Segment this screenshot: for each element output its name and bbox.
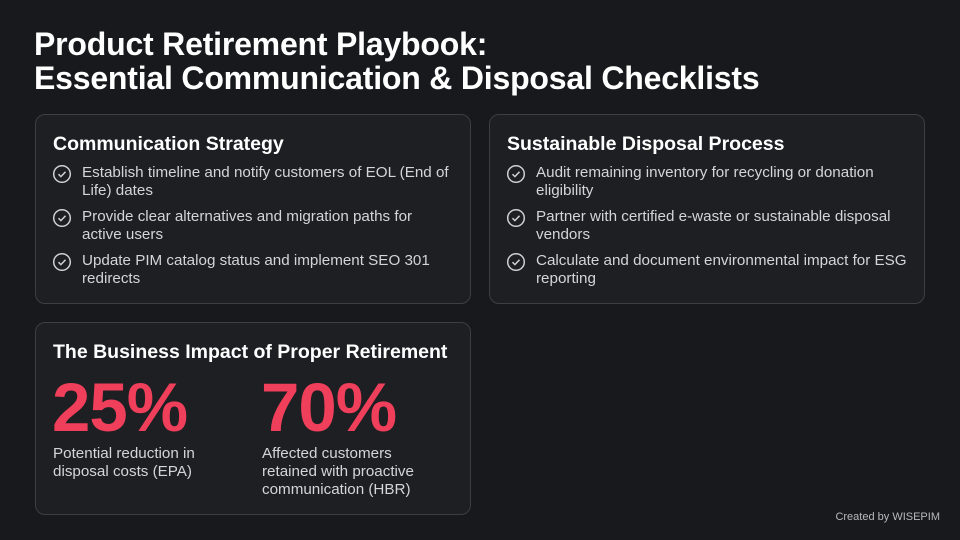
panel: sustainable disposal — [489, 114, 925, 304]
item 1: Audit remaining inventory for recycling or donation — [536, 164, 874, 181]
title — [34, 26, 759, 96]
item 2: vendors — [536, 226, 590, 243]
item 2 — [506, 208, 891, 243]
item 1: Life) dates — [82, 182, 153, 199]
item 3 — [52, 252, 430, 287]
caption 70%: communication (HBR) — [262, 481, 411, 498]
item 2: active users — [82, 226, 163, 243]
caption 25%: disposal costs (EPA) — [53, 463, 192, 480]
heading: Sustainable Disposal Process — [507, 133, 784, 155]
panel: communication strategy — [35, 114, 471, 304]
item 3: Update PIM catalog status and implement SEO 301 — [82, 252, 430, 269]
item 2 — [52, 208, 412, 243]
item 3 — [506, 252, 907, 287]
item 1 — [52, 164, 449, 199]
title: Product Retirement Playbook: — [34, 26, 487, 62]
caption 70%: Affected customers — [262, 445, 392, 462]
item 3: reporting — [536, 270, 596, 287]
heading: Communication Strategy — [53, 133, 284, 155]
stat 25%: 25% — [52, 369, 187, 446]
item 2: Provide clear alternatives and migration paths for — [82, 208, 412, 225]
caption 25%: Potential reduction in — [53, 445, 195, 462]
caption 70%: retained with proactive — [262, 463, 414, 480]
heading: The Business Impact of Proper Retirement — [53, 341, 447, 363]
item 3: Calculate and document environmental impact for ESG — [536, 252, 907, 269]
caption 25% — [53, 445, 195, 480]
item 1: Establish timeline and notify customers of EOL (End of — [82, 164, 449, 181]
item 3: redirects — [82, 270, 140, 287]
caption 70% — [262, 445, 414, 498]
stat 70%: 70% — [261, 369, 396, 446]
title: Essential Communication & Disposal Checklists — [34, 60, 759, 96]
item 1 — [506, 164, 874, 199]
item 1: eligibility — [536, 182, 593, 199]
panel: business impact — [35, 322, 471, 515]
item 2: Partner with certified e-waste or sustainable disposal — [536, 208, 891, 225]
credit: Created by WISEPIM — [835, 511, 940, 523]
